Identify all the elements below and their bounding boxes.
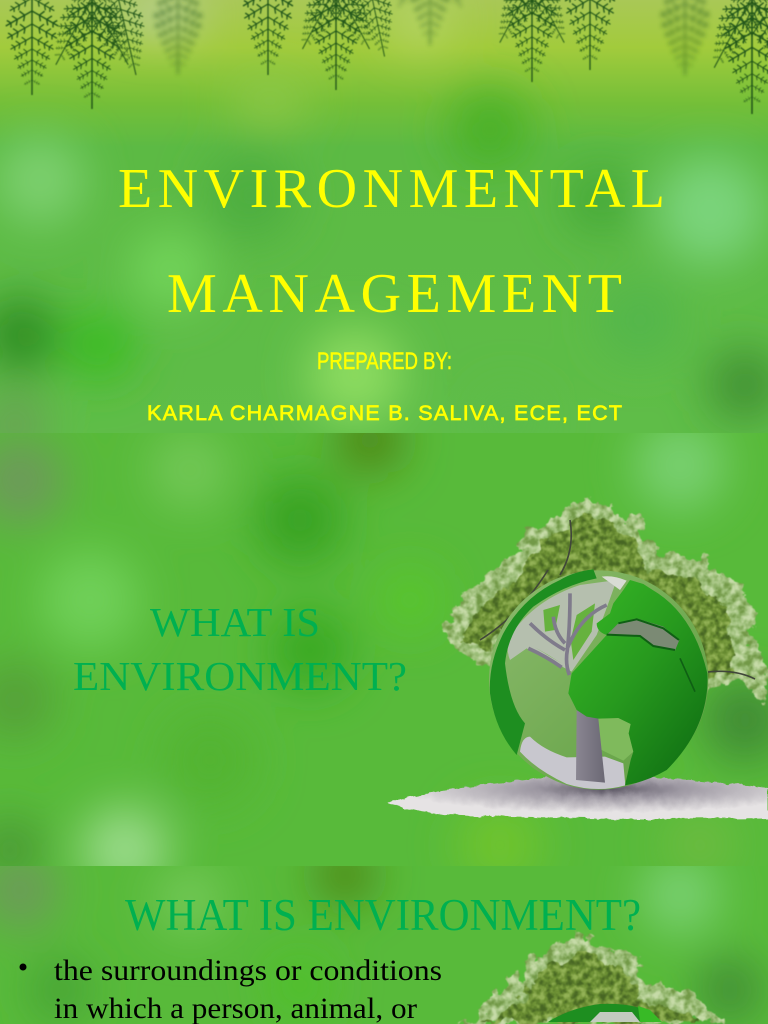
- heading: what is environment: WHAT IS: [150, 599, 320, 645]
- tree canopy: [442, 495, 768, 702]
- slide 1: title slide: [0, 0, 768, 455]
- heading: what is environment: ENVIRONMENT?: [73, 653, 407, 699]
- author name: KARLA CHARMAGNE B. SALIVA, ECE, ECT: [147, 401, 622, 425]
- heading: what is environment: [73, 599, 407, 699]
- heading: what is environment: WHAT IS ENVIRONMENT?: [125, 890, 641, 940]
- slide 2: what is environment: [0, 406, 768, 894]
- icon: tree globe on ground: [386, 495, 768, 819]
- bullet text: [20, 954, 442, 1024]
- slide 2 background: [0, 406, 768, 894]
- slide 3: definition: [0, 845, 768, 1024]
- slide 3 background: [0, 845, 768, 1024]
- title: [118, 158, 665, 325]
- title: MANAGEMENT: [167, 263, 622, 325]
- hanging fir branches: [6, 0, 768, 114]
- title: ENVIRONMENTAL: [118, 158, 665, 220]
- ground patch: [386, 776, 768, 819]
- slide 1 background: [0, 0, 768, 455]
- globe: [489, 569, 708, 790]
- bullet text: the surroundings or conditions: [54, 954, 442, 987]
- prepared by label: PREPARED BY:: [317, 348, 452, 375]
- icon: tree globe, cropped by page bottom: [462, 932, 722, 1022]
